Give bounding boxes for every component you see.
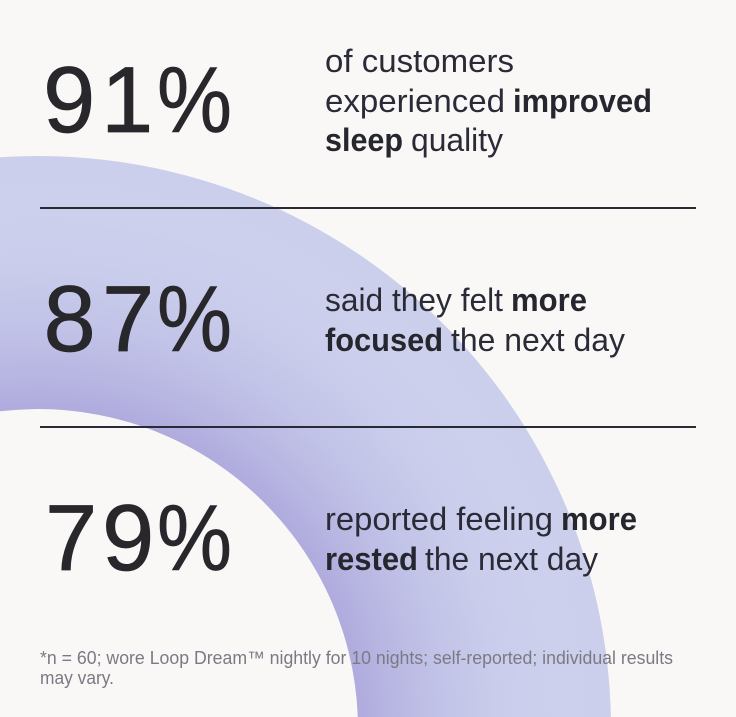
description: improved sleep quality: of customers [325,43,514,79]
stat number 79%: 79 [45,485,154,590]
footnote: *n = 60; wore Loop Dream™ nightly for 10 nights; self-reported; individual results [40,648,673,668]
stat row: 91% [43,43,652,158]
description: more rested [325,501,637,577]
description: more rested: reported feeling [325,501,553,537]
footnote: may vary. [40,668,114,688]
description: more focused: the next day [451,322,626,358]
stat number 91% [43,47,232,152]
footnote [40,648,673,688]
description: more focused [325,282,626,358]
stat row: 87% [44,266,626,371]
stat number 87% [44,266,232,371]
stat row: 79% [45,485,637,590]
description: improved sleep quality: quality [411,122,504,158]
stat number 91%: 91 [43,47,153,152]
description: more focused: said they felt [325,282,503,318]
description: improved sleep quality: experienced [325,83,505,119]
stat number 79%: % [157,485,232,590]
stat number 87%: % [157,266,232,371]
stat number 91%: % [157,47,232,152]
stat number 87%: 87 [44,266,154,371]
description: more rested: more [561,501,637,537]
description: more focused: more [511,282,587,318]
description: more rested: rested [325,541,418,577]
decorative arc band [0,156,611,717]
description: more focused: focused [325,322,443,358]
description: improved sleep quality [325,43,652,158]
description: improved sleep quality: sleep [325,122,403,158]
description: more rested: the next day [425,541,599,577]
divider 2 [40,426,696,428]
divider 1 [40,207,696,209]
description: improved sleep quality: improved [513,83,652,119]
stat number 79% [45,485,232,590]
